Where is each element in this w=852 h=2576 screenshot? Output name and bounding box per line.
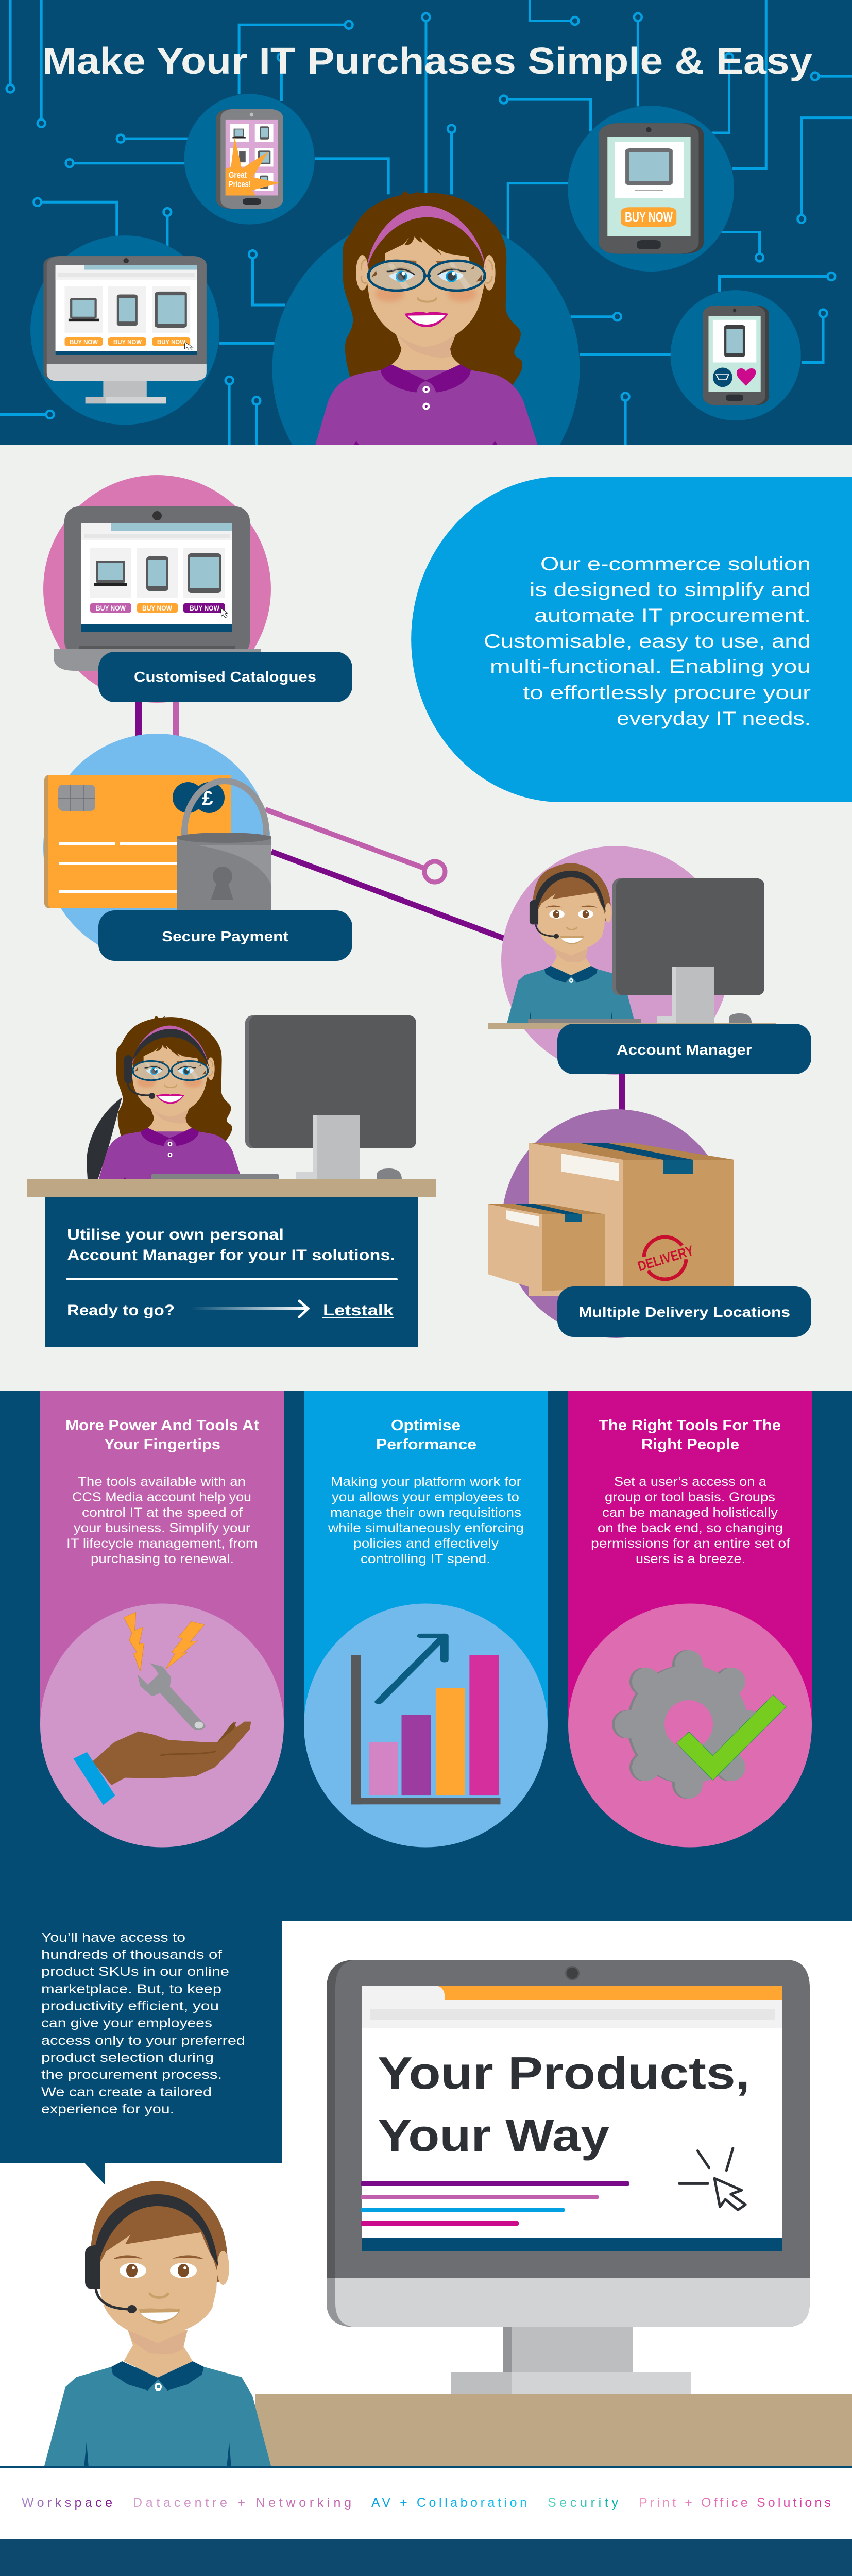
heading on screen: Your Products, <box>378 2047 750 2098</box>
panel: category list: Workspace <box>22 2496 112 2510</box>
panel: footer contact bar <box>0 2539 852 2576</box>
icon: laptop: BUY NOW <box>190 604 220 612</box>
panel: more power and tools: purchasing to renewal. <box>91 1552 234 1566</box>
illustration: man with headset <box>506 863 636 1027</box>
speech bubble with text: hundreds of thousands of <box>41 1947 222 1962</box>
heading on screen <box>378 2047 750 2161</box>
icon: mouse cursor click <box>679 2148 745 2210</box>
icon: delivery boxes <box>488 1143 734 1296</box>
panel: the right tools: users is a breeze. <box>636 1552 745 1566</box>
desk <box>255 2394 852 2466</box>
illustration: woman with headset <box>98 1016 242 1180</box>
arrow <box>191 1301 308 1317</box>
illustration: woman with glasses <box>315 191 538 445</box>
panel: header hero <box>0 0 852 523</box>
speech bubble with text: access only to your preferred <box>41 2033 245 2048</box>
label pill: Account Manager <box>617 1042 752 1058</box>
panel: more power and tools: More Power And Tools At <box>65 1417 259 1434</box>
bar chart with rising arrow <box>351 1636 500 1804</box>
label pill: Multiple Delivery Locations <box>578 1304 790 1320</box>
panel: optimise performance <box>304 1391 548 1848</box>
call to action panel: Account Manager for your IT solutions. <box>67 1247 395 1264</box>
icon: laptop <box>54 506 261 671</box>
panel: optimise performance: Making your platform work for <box>331 1475 521 1489</box>
label pill <box>557 1024 811 1074</box>
panel: category list: Security <box>548 2496 618 2510</box>
title: Make Your IT Purchases Simple & Easy <box>42 41 812 82</box>
panel: e-commerce intro bubble: Our e-commerce solution <box>540 553 811 574</box>
panel: the right tools: can be managed holistically <box>602 1505 778 1520</box>
icon: hand holding wrench <box>73 1612 251 1805</box>
icon: gear with check mark <box>626 1664 786 1785</box>
speech bubble with text: the procurement process. <box>41 2067 222 2082</box>
panel: category list: Datacentre + Networking <box>133 2496 351 2510</box>
speech bubble with text: productivity efficient, you <box>41 1999 219 2013</box>
panel: secure payment <box>43 734 505 961</box>
icon: phone with great prices: Great <box>229 170 247 180</box>
divider line <box>0 2466 852 2468</box>
panel: optimise performance: controlling IT spend. <box>361 1552 490 1566</box>
icon: tablet buy now: BUY NOW <box>625 209 673 225</box>
panel: e-commerce intro bubble <box>411 477 852 802</box>
icon: desktop monitor catalogue: BUY NOW <box>157 338 186 346</box>
speech bubble with text: can give your employees <box>41 2016 212 2030</box>
panel: more power and tools: your business. Simplify your <box>74 1521 250 1535</box>
call to action panel <box>45 1197 418 1347</box>
speech bubble with text: product selection during <box>41 2050 214 2065</box>
panel: personal account manager desk <box>27 1015 436 1347</box>
panel: e-commerce intro bubble: multi-functional. Enabling you <box>490 656 811 677</box>
speech bubble with text: You’ll have access to <box>41 1930 185 1945</box>
panel: optimise performance: you allows your employees to <box>332 1490 519 1504</box>
coloured text bars <box>361 2181 629 2226</box>
icon: phone with great prices <box>216 109 283 209</box>
panel: optimise performance: manage their own requisitions <box>330 1505 521 1520</box>
label pill <box>557 1286 811 1337</box>
icon: padlock <box>177 781 271 913</box>
panel: the right tools: The Right Tools For The <box>599 1417 781 1434</box>
panel: more power and tools <box>40 1391 284 1848</box>
panel: e-commerce intro bubble: automate IT procurement. <box>534 605 811 626</box>
speech bubble with text: We can create a tailored <box>41 2085 212 2099</box>
icon: desktop monitor catalogue: BUY NOW <box>113 338 142 346</box>
panel: optimise performance: while simultaneously enforcing <box>328 1521 524 1535</box>
circuit board lines <box>0 0 852 523</box>
panel: e-commerce intro bubble: Customisable, easy to use, and <box>484 631 811 652</box>
call to action panel: Utilise your own personal <box>67 1226 284 1243</box>
panel: more power and tools: Your Fingertips <box>104 1436 220 1453</box>
speech bubble with text <box>0 1921 282 2185</box>
heading on screen: Your Way <box>378 2110 609 2161</box>
panel: more power and tools: CCS Media account help you <box>72 1490 251 1504</box>
panel: e-commerce intro bubble: everyday IT needs. <box>617 708 811 729</box>
speech bubble with text: experience for you. <box>41 2102 174 2116</box>
panel: customised catalogues <box>43 475 352 737</box>
panel: e-commerce intro bubble: to effortlessly procure your <box>523 682 811 703</box>
icon: laptop: BUY NOW <box>142 604 173 612</box>
panel: the right tools: permissions for an entire set of <box>591 1536 790 1551</box>
panel: the right tools: group or tool basis. Groups <box>605 1490 775 1504</box>
panel: more power and tools: The tools available with an <box>78 1475 246 1489</box>
panel: the right tools: on the back end, so changing <box>598 1521 783 1535</box>
panel: the right tools <box>568 1391 812 1848</box>
call to action panel: Letstalk <box>323 1302 394 1319</box>
icon: phone with cart and heart <box>703 306 769 405</box>
panel: category list: Print + Office Solutions <box>639 2496 831 2510</box>
label pill: Customised Catalogues <box>134 669 316 685</box>
icon: monitor on desk <box>488 878 776 1029</box>
label pill: Secure Payment <box>162 928 288 944</box>
illustration: large man with headset <box>44 2181 271 2468</box>
icon: desktop monitor catalogue: BUY NOW <box>70 338 98 346</box>
call to action panel: Ready to go? <box>67 1302 175 1319</box>
icon: desktop monitor <box>151 1015 416 1180</box>
speech bubble with text: product SKUs in our online <box>41 1964 229 1979</box>
panel: category list: AV + Collaboration <box>371 2496 527 2510</box>
icon: tablet buy now <box>599 123 704 254</box>
illustration: office chair <box>87 1097 122 1179</box>
panel: e-commerce intro bubble: is designed to simplify and <box>530 579 811 600</box>
speech bubble with text: marketplace. But, to keep <box>41 1982 221 1996</box>
panel: navy features band <box>0 1391 852 1921</box>
panel: optimise performance: Optimise <box>391 1417 461 1434</box>
panel: more power and tools: control IT at the speed of <box>82 1505 243 1520</box>
panel: the right tools: Right People <box>641 1436 739 1453</box>
icon: credit card: £ <box>202 788 213 809</box>
illustration: large monitor with your products your way <box>327 1960 810 2394</box>
panel: optimise performance: Performance <box>376 1436 476 1453</box>
panel: multiple delivery locations <box>488 1109 811 1338</box>
panel: light section background <box>0 445 852 1391</box>
label pill <box>98 910 352 961</box>
panel: your products section white background <box>0 1921 852 2467</box>
icon: phone with great prices: Prices! <box>229 179 251 189</box>
panel: optimise performance: policies and effectively <box>353 1536 499 1551</box>
label pill <box>98 652 352 702</box>
panel: the right tools: Set a user’s access on a <box>614 1475 766 1489</box>
icon: delivery boxes: DELIVERY <box>636 1243 695 1274</box>
panel: account manager <box>488 846 811 1110</box>
panel: more power and tools: IT lifecycle management, from <box>66 1536 258 1551</box>
icon: credit card <box>44 775 231 908</box>
icon: laptop: BUY NOW <box>96 604 126 612</box>
panel: category list <box>0 2468 852 2539</box>
icon: desktop monitor catalogue <box>43 256 207 403</box>
